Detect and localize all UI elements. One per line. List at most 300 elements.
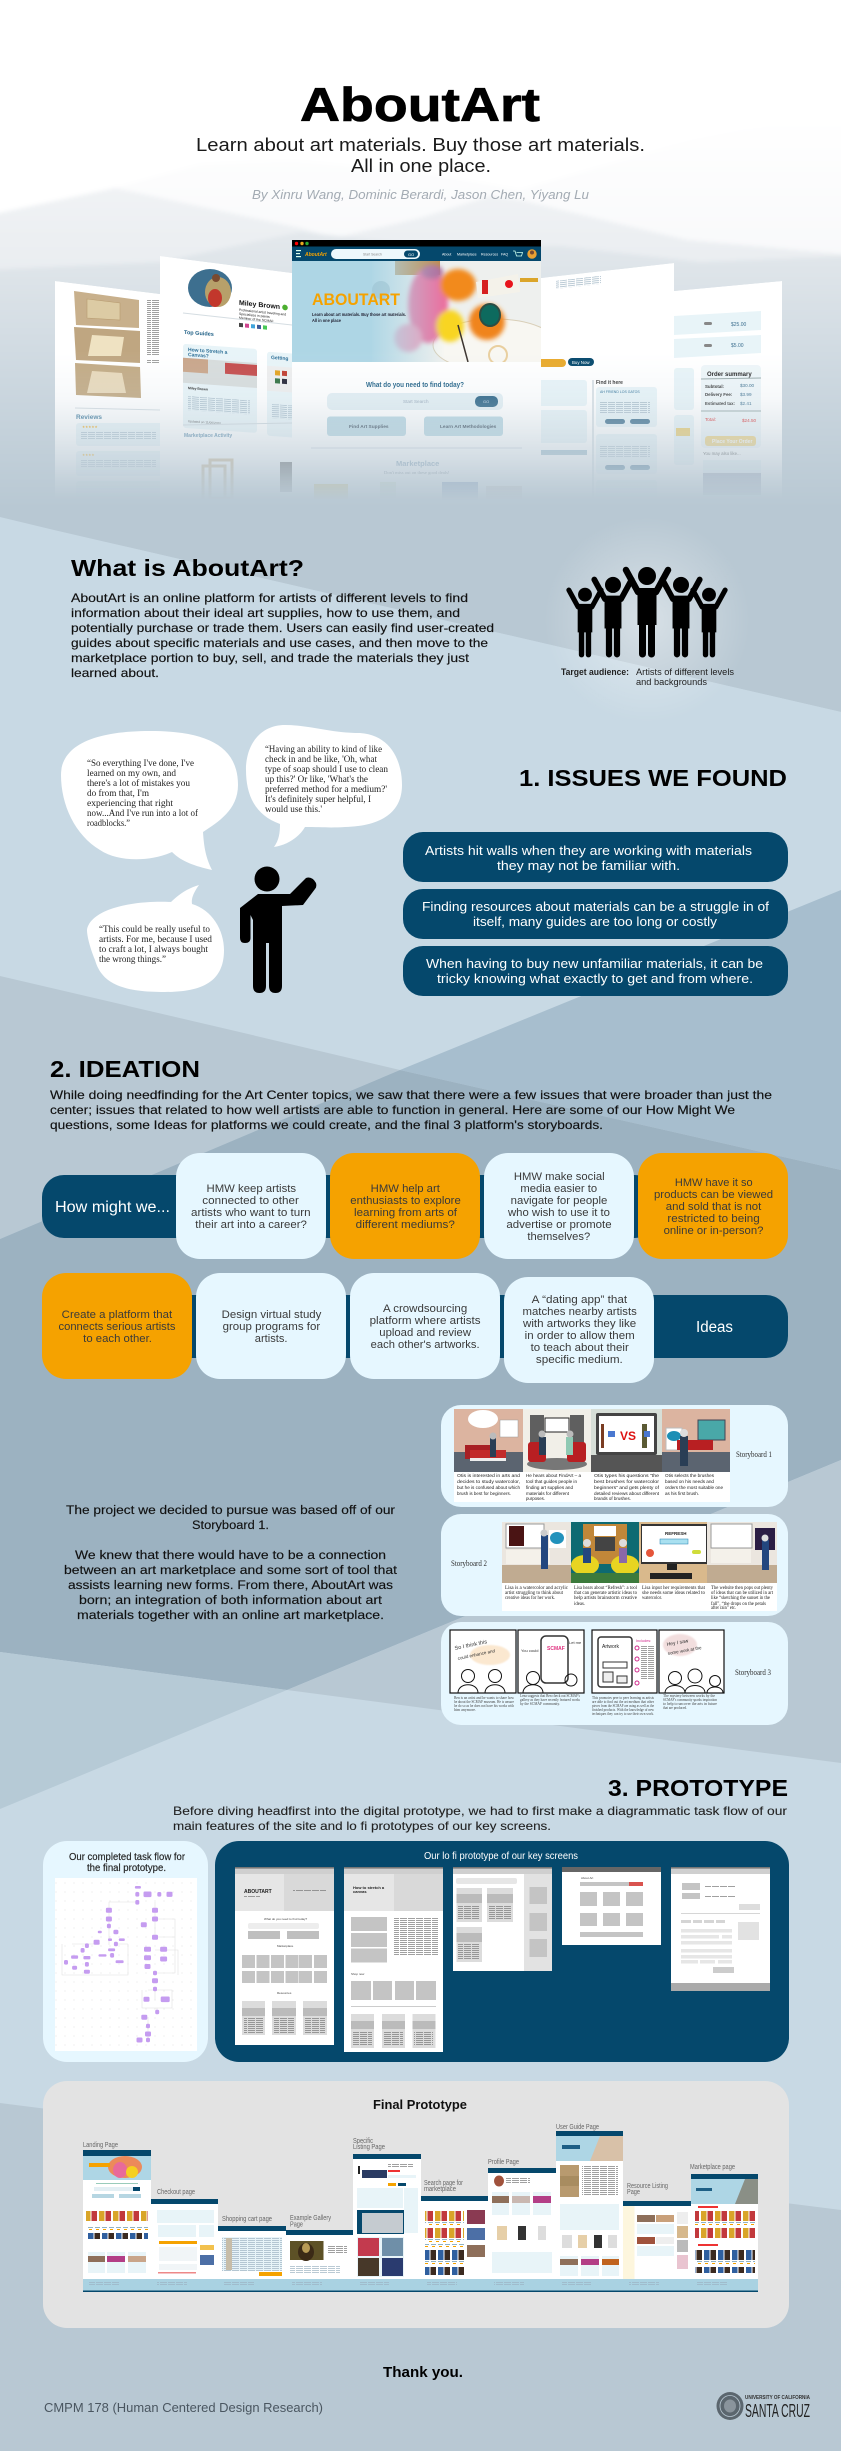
course label: CMPM 178 (Human Centered Design Research) [44, 2400, 323, 2415]
issue pill 1 [403, 832, 788, 882]
frame 3: REFRESH [665, 1531, 687, 1536]
mockup: landing page: All in one place [312, 318, 342, 323]
mockup: landing page: GO [483, 399, 489, 404]
authors: By Xinru Wang, Dominic Berardi, Jason Chen, Yiyang Lu [252, 187, 589, 202]
issue pill 2 [403, 889, 788, 939]
mockup: guide page: ★★★★★ [82, 425, 99, 429]
description [71, 591, 494, 680]
screen: landing: Landing Page [83, 2142, 118, 2149]
final screens [83, 2124, 758, 2292]
lo fi screen: guide [344, 1867, 443, 2052]
panel: storyboard 1: brands of brushes. [594, 1496, 631, 1502]
panel: storyboard 2: like “sketching the sunset in the [711, 1595, 770, 1601]
idea card 2: artists. [255, 1333, 288, 1345]
panel: storyboard 1: brush is best for beginners. [457, 1491, 511, 1497]
idea card 3: A crowdsourcing [383, 1303, 467, 1315]
screen: product listing: Specific [353, 2138, 373, 2145]
mockup: checkout page: $30.00 [740, 383, 754, 388]
frame 1 [454, 1409, 523, 1472]
issue pill 2: itself, many guides are too long or costly [473, 915, 718, 929]
idea card 4: in order to allow them [525, 1330, 635, 1342]
screen: gallery: Page [290, 2222, 303, 2228]
icon: person pointing [240, 866, 316, 993]
screen: cart [218, 2216, 286, 2279]
mockup: landing page: Resources [481, 252, 498, 256]
storyboard explanation text: born; an integration of both information about art [79, 1593, 383, 1607]
panel: lo fi prototype: Our lo fi prototype of our key screens [424, 1851, 578, 1862]
frame 3: Includes: [636, 1639, 651, 1643]
panel: storyboard 3 [441, 1622, 788, 1725]
mockup: landing page: What do you need to find today? [366, 380, 464, 389]
heading: issues we found: 1. ISSUES WE FOUND [519, 765, 787, 791]
frame 4 [662, 1409, 730, 1472]
mockup: profile page: Top Guides [184, 330, 214, 338]
how might we row [42, 1153, 788, 1259]
lo fi screen: landing: Resources [277, 1991, 292, 1995]
HMW card 1 [176, 1153, 326, 1259]
panel: task flow: the final prototype. [87, 1863, 166, 1874]
frame 2 [523, 1409, 591, 1472]
panel: storyboard 2: that can generate artistic ideas to [574, 1591, 638, 1596]
description: AboutArt is an online platform for artists of different levels to find [71, 591, 468, 605]
HMW card 2: HMW help art [371, 1183, 440, 1195]
screen: search results [421, 2180, 488, 2279]
mockup: profile page: Specializes in paints [239, 312, 270, 319]
how might we label bar: How might we... [55, 1199, 170, 1216]
idea card 4: A “dating app” that [532, 1294, 627, 1306]
panel: storyboard 2: help artists brainstorm creative [574, 1596, 637, 1601]
frame 3: Artwork [602, 1644, 619, 1650]
panel: storyboard 2: Lisa hears about “Refresh”: a tool [574, 1585, 638, 1591]
panel: storyboard 1 [441, 1405, 788, 1507]
idea card 1: Create a platform that [62, 1309, 172, 1321]
heading: What is AboutArt? [71, 555, 304, 581]
storyboard explanation text: We knew that there would have to be a connection [75, 1548, 386, 1562]
frame 2: Let me [569, 1640, 582, 1645]
panel: storyboard 2: Lisa is a watercolor and acrylic [505, 1586, 568, 1591]
mockup: profile page: Canvas? [188, 352, 209, 360]
mockup: profile page [160, 256, 292, 490]
mockup: landing page: Marketplace [457, 252, 477, 256]
speech bubble: self taught: “So everything I've done, I've [87, 758, 194, 769]
screen: user guide [556, 2124, 623, 2279]
frame 1: So I think this [454, 1639, 488, 1652]
idea card 4: matches nearby artists [522, 1306, 637, 1318]
HMW card 4: and sold that is not [666, 1201, 761, 1213]
screen: resource listing: Page [627, 2189, 640, 2196]
frame 4 [707, 1522, 777, 1583]
idea card 3: platform where artists [370, 1315, 481, 1327]
panel: storyboard 3: that are produced. [663, 1706, 687, 1710]
description: learned about. [71, 666, 159, 680]
panel: storyboard 3: he do so as he does not have his works with [454, 1704, 514, 1708]
panel: task flow: Our completed task flow for [69, 1852, 186, 1863]
issue pill 1: they may not be familiar with. [497, 859, 680, 873]
screen: product listing: Listing Page [353, 2144, 385, 2151]
HMW card 1: connected to other [202, 1195, 299, 1207]
speech bubble: self taught: there's a lot of mistakes you [87, 778, 190, 789]
idea card 1: to each other. [83, 1333, 152, 1345]
speech bubble: wrong things: to craft a lot, I always bought [99, 944, 208, 955]
speech bubble: self taught: roadblocks.” [87, 818, 130, 829]
mockup: landing page: Start Search [403, 399, 429, 404]
issue pill 2: Finding resources about materials can be a struggle in of [422, 900, 770, 914]
description: guides about specific materials and use cases, and then move to the [71, 636, 488, 650]
panel: task flow [43, 1841, 208, 2062]
mockup: landing page: GO [408, 252, 414, 257]
screen: resource listing: Resource Listing [627, 2183, 668, 2190]
screen: landing [83, 2142, 151, 2279]
lo fi screen: guide: How to stretch a [353, 1885, 385, 1890]
panel: storyboard 3: pieces from the SCMAF are using as well as the [592, 1704, 654, 1708]
icon: target audience group [542, 515, 752, 725]
panel: storyboard 3: he about the SCMAF museum. He is unsure [454, 1700, 514, 1704]
mockup: checkout page: $25.00 [731, 322, 747, 328]
screen: gallery: Example Gallery [290, 2215, 331, 2222]
frame 3 [591, 1409, 662, 1472]
mockup: landing page: AboutArt [304, 252, 327, 258]
speech bubble: wrong things [87, 885, 224, 992]
mockup: profile page: Marketplace Activity [184, 433, 232, 439]
description: information about their ideal art supplies, how to use them, and [71, 606, 460, 620]
title: AboutArt [300, 78, 540, 131]
section: what is AboutArt [71, 555, 494, 680]
lo fi screen: landing [235, 1867, 334, 2045]
panel: storyboard 1: purposes. [526, 1496, 545, 1502]
storyboard explanation text: assists learning new forms. From there, AboutArt was [68, 1578, 393, 1592]
idea card 4: to teach about their [531, 1342, 629, 1354]
issue pill 1: Artists hit walls when they are working with materials [425, 844, 752, 858]
idea card 2: group programs for [223, 1321, 321, 1333]
panel: storyboard 1: decides to study watercolor, [457, 1479, 520, 1485]
screen: user guide: User Guide Page [556, 2124, 599, 2131]
panel: storyboard 1: Otis types his questions “the [594, 1473, 659, 1479]
panel: storyboard 3: Ben is an artist and he wants to share how [454, 1696, 514, 1700]
mockup: landing page: Learn Art Methodologies [440, 424, 497, 430]
HMW card 1: artists who want to turn [191, 1207, 311, 1219]
mockup: product page [541, 263, 674, 480]
heading: prototype: 3. PROTOTYPE [608, 1775, 788, 1801]
panel: storyboard 2 [441, 1514, 788, 1616]
mockup: profile page: Member of the SCMAF [239, 316, 274, 323]
panel: storyboard 3: Storyboard 3 [735, 1667, 771, 1677]
HMW card 2: learning from arts of [354, 1207, 458, 1219]
panel: storyboard 1: materials for different [526, 1491, 570, 1497]
panel: storyboard 2: Storyboard 2 [451, 1558, 487, 1568]
frame 1 [450, 1630, 516, 1693]
speech bubble: self taught: do from that, I'm [87, 788, 150, 799]
frame 3: VS [620, 1429, 636, 1443]
lo fi screen: landing: ABOUTART [244, 1889, 272, 1895]
speech bubble: self taught: now...And I've run into a lot of [87, 808, 199, 819]
speech bubble: wrong things: “This could be really useful to [99, 924, 210, 935]
idea card 1 [42, 1273, 192, 1379]
panel: storyboard 3: techniques they can try to use their own work. [592, 1712, 654, 1716]
mockup: product page: Buy Now [572, 360, 590, 365]
speech bubble: self taught: experiencing that right [87, 798, 173, 809]
panel: storyboard 3: by the SCMAF community. [520, 1702, 560, 1706]
storyboard explanation text: between an art marketplace and some sort of tool that [64, 1563, 398, 1577]
screen: cart: Shopping cart page [222, 2216, 272, 2223]
panel: storyboard 3: are able to find out the art medium that other [592, 1700, 655, 1704]
mockup: product page: ick Liquid Watercolors [541, 216, 616, 233]
issue pill 3: When having to buy new unfamiliar materials, it can be [426, 957, 763, 971]
HMW card 4: products can be viewed [654, 1189, 773, 1201]
panel: storyboard 3: This promotes peer to peer learning as artists [592, 1696, 655, 1700]
panel: storyboard 1: Otis is interested in arts and [457, 1473, 520, 1479]
panel: storyboard 1: He hears about FindArt – a [526, 1473, 581, 1479]
HMW card 3: who wish to use it to [507, 1207, 610, 1219]
ideation description: While doing needfinding for the Art Center topics, we saw that there were a few issues that were broader than just the [50, 1088, 772, 1102]
idea card 3: each other's artworks. [371, 1339, 480, 1351]
website mockups [55, 240, 782, 492]
frame 4: some work at the [667, 1645, 702, 1656]
screen: profile [488, 2159, 556, 2279]
HMW card 2: enthusiasts to explore [350, 1195, 461, 1207]
HMW card 4: online or in-person? [664, 1225, 763, 1237]
mockup: profile page: Getting [271, 355, 288, 362]
mockup: landing page: Start Search [363, 252, 382, 256]
frame 1: could enhance and [457, 1648, 496, 1661]
mockup: checkout page: Estimated tax: [705, 401, 736, 406]
panel: storyboard 2: watercolor. [642, 1596, 662, 1601]
panel: storyboard 1: Storyboard 1 [736, 1449, 772, 1459]
storyboard explanation text [64, 1503, 398, 1622]
how might we label bar [42, 1175, 657, 1238]
panel: storyboard 3: finished products. With the knowledge of new [592, 1708, 654, 1712]
panel: storyboard 3: him anymore. [454, 1708, 476, 1712]
HMW card 1: HMW keep artists [206, 1183, 297, 1195]
panel: storyboard 1: beginners” and gets plenty of [594, 1485, 660, 1491]
issue pill 3 [403, 946, 788, 996]
panel: final prototype [43, 2081, 789, 2328]
panel: storyboard 2: The website then pops out plenty [711, 1586, 774, 1591]
ideas row [42, 1273, 788, 1383]
thank you: Thank you. [383, 2365, 463, 2381]
panel: storyboard 2: after rain” etc. [711, 1606, 736, 1611]
HMW card 2: different mediums? [356, 1219, 455, 1231]
panel: storyboard 1: but he is confused about which [457, 1485, 520, 1491]
panel: storyboard 3: gallery as they have recently featured works [520, 1698, 581, 1702]
mockup: checkout page: $24.50 [742, 418, 756, 423]
mockup: checkout page: Place Your Order [712, 439, 752, 445]
ideation description: center; issues that related to how well artists are able to function in general. Here are some of our How Might We [50, 1103, 735, 1117]
description: marketplace portion to buy, sell, and trade the materials they just [71, 651, 470, 665]
mockup: profile page: Updated on 11/06/2020 [188, 419, 221, 425]
mockup: guide page: ★★★★ [82, 453, 95, 457]
subtitle: All in one place. [351, 155, 491, 176]
mockup: product page: 2.93 - $112.00 [541, 235, 586, 246]
HMW card 4 [638, 1153, 788, 1259]
ideas label bar: Ideas [696, 1319, 733, 1336]
lo fi screen: guide: Shop now [351, 1972, 365, 1976]
mockup: product page: AH FRIEND LOS GATOS [600, 390, 640, 394]
speech bubble: ability to check in: check in and be like, 'Oh, what [265, 754, 377, 765]
mockup: landing page: Marketplace [396, 459, 439, 468]
speech bubble: ability to check in: up this?' Or like, 'What's the [265, 774, 368, 785]
mockup: checkout page: $3.99 [740, 392, 752, 397]
panel: storyboard 3: Lena suggests that Ben check out SCMAF's [520, 1694, 581, 1698]
idea card 3: upload and review [379, 1327, 471, 1339]
frame 2: SCMAF [547, 1646, 565, 1652]
prototype description [173, 1804, 787, 1833]
panel: storyboard 1: as his first brush. [665, 1491, 699, 1497]
panel: storyboard 1: best brushes for watercolor [594, 1479, 659, 1485]
panel: storyboard 2: of ideas that can be utilized in art [711, 1591, 774, 1596]
HMW card 3: navigate for people [511, 1195, 607, 1207]
frame 2: You could [521, 1648, 538, 1653]
screen: search results: Search page for [424, 2180, 464, 2187]
mockup: profile page: Miley Brown [188, 386, 208, 392]
HMW card 3: HMW make social [514, 1171, 605, 1183]
panel: storyboard 3: The mystery between works by the [663, 1694, 715, 1698]
issue pill 3: tricky knowing what exactly to get and from where. [437, 972, 753, 986]
HMW card 4: restricted to being [667, 1213, 760, 1225]
mockup: landing page: Find Art Supplies [349, 424, 389, 430]
storyboard explanation text: The project we decided to pursue was based off of our [66, 1503, 395, 1517]
screen: checkout: Checkout page [157, 2189, 195, 2196]
panel: storyboard 3: to help to uncover the arts in future [663, 1702, 717, 1706]
HMW card 1: their art into a career? [195, 1219, 307, 1231]
speech bubble: ability to check in [246, 725, 402, 847]
panel: storyboard 3: SCMAF's community sparks inspiration [663, 1698, 717, 1702]
UCSC logo [716, 2392, 810, 2421]
idea card 2 [196, 1273, 346, 1379]
screen: product listing [353, 2138, 421, 2279]
mockup: landing page: FAQ [501, 252, 508, 256]
screen: marketplace [690, 2164, 758, 2279]
mockup: checkout page: Subtotal: [705, 384, 725, 389]
mockup: profile page: Professional artist traveling and [239, 308, 286, 317]
speech bubble: ability to check in: would use this.' [265, 804, 322, 815]
mockup: landing page: Learn about art materials. Buy those art materials. [312, 312, 406, 317]
mockup: landing page [292, 240, 541, 492]
frame 3 [592, 1630, 657, 1693]
lo fi screen: gallery [562, 1867, 661, 1945]
speech bubble: ability to check in: type of soap should I use to clean [265, 764, 388, 775]
subtitle [196, 134, 645, 176]
panel: storyboard 2: Lisa input her requirements that [642, 1586, 706, 1591]
HMW card 2 [330, 1153, 480, 1259]
frame 3 [639, 1522, 707, 1583]
frame 4: Hey I saw [666, 1638, 689, 1648]
mockup: checkout page [674, 281, 782, 480]
target audience caption: Target audience: [561, 667, 629, 677]
frame 2 [571, 1522, 639, 1583]
panel: storyboard 2: fall”, “the drops on the petals [711, 1601, 766, 1607]
panel: storyboard 2: creative ideas for her work. [505, 1596, 555, 1601]
screen: gallery [286, 2215, 353, 2279]
frame 4 [659, 1630, 724, 1693]
speech bubble: ability to check in: “Having an ability to kind of like [265, 744, 382, 755]
ideation description [50, 1088, 772, 1132]
screen: marketplace: Marketplace page [690, 2164, 735, 2171]
idea card 2: Design virtual study [222, 1309, 322, 1321]
idea card 4 [504, 1277, 654, 1383]
mockup: landing page: About [442, 252, 451, 256]
mockup: landing page: ABOUTART [312, 290, 401, 309]
HMW card 3: media easier to [520, 1183, 597, 1195]
UCSC logo: UNIVERSITY OF CALIFORNIA [745, 2395, 810, 2401]
HMW card 3: themselves? [527, 1231, 590, 1243]
HMW card 3 [484, 1153, 634, 1259]
target audience caption: and backgrounds [636, 677, 708, 687]
speech bubble: ability to check in: It's definitely super helpful, I [265, 794, 371, 805]
target audience caption: Artists of different levels [636, 667, 735, 677]
lo fi screen: checkout [671, 1867, 770, 1991]
speech bubble: self taught: learned on my own, and [87, 768, 176, 779]
idea card 4: specific medium. [536, 1354, 623, 1366]
screen: search results: marketplace [424, 2186, 456, 2193]
storyboard explanation text: materials together with an online art marketplace. [77, 1608, 384, 1622]
lo fi screen: guide: canvas [353, 1889, 367, 1894]
frame 1 [502, 1522, 571, 1583]
mockup: profile page: How to Stretch a [188, 347, 228, 356]
HMW card 3: advertise or promote [506, 1219, 612, 1231]
target audience caption [561, 667, 735, 687]
ideation description: questions, some Ideas for platforms we could create, and the final 3 platform's storyboards. [50, 1118, 603, 1132]
panel: storyboard 1: finding art supplies and [526, 1485, 573, 1491]
mockup: profile page: Miley Brown [239, 300, 280, 311]
mockup: checkout page: $5.00 [731, 343, 744, 349]
speech bubble: ability to check in: preferred method for a medium?' [265, 784, 387, 795]
panel: storyboard 1: tool that guides people in [526, 1479, 577, 1485]
screen: checkout [151, 2189, 218, 2279]
mockup: guide page [55, 281, 160, 480]
panel: storyboard 1: Otis selects the brushes [665, 1473, 715, 1479]
speech bubble: wrong things: the wrong things.” [99, 954, 166, 965]
panel: storyboard 1: detailed reviews about different [594, 1491, 660, 1497]
lo fi screen: landing: Marketplace [277, 1944, 294, 1948]
panel: storyboard 1: orders the most suitable one [665, 1485, 723, 1491]
speech bubble: self taught [61, 731, 238, 870]
mockup: checkout page: Total: [705, 417, 716, 422]
screen: profile: Profile Page [488, 2159, 519, 2166]
prototype description: main features of the site and lo fi prototypes of our key screens. [173, 1819, 551, 1833]
mockup: landing page: Don't miss out on these good deals! [384, 470, 450, 475]
mockup: guide page: Reviews [76, 414, 102, 421]
speech bubble: wrong things: artists. For me, because I used [99, 934, 212, 945]
screen footers [83, 2279, 758, 2292]
panel: storyboard 2: she needs some ideas related to [642, 1591, 706, 1596]
panel: storyboard 2: artist struggling to think about [505, 1591, 564, 1596]
idea card 1: connects serious artists [58, 1321, 176, 1333]
panel: storyboard 1: based on his needs and [665, 1479, 714, 1485]
frame 2 [518, 1630, 584, 1693]
mockup: product page: Find it here [596, 380, 623, 386]
panel: storyboard 2: ideas. [574, 1602, 585, 1607]
mockup: checkout page: You may also like... [703, 451, 741, 456]
idea card 3 [350, 1273, 500, 1379]
lo fi screen: resources [453, 1867, 552, 1971]
HMW card 4: HMW have it so [675, 1177, 753, 1189]
task flow diagram [62, 1886, 178, 2042]
lo fi screen: gallery: About Art [581, 1876, 594, 1880]
storyboard explanation text: Storyboard 1. [192, 1518, 269, 1532]
subtitle: Learn about art materials. Buy those art materials. [196, 134, 645, 155]
ideas label bar [170, 1295, 788, 1358]
lo fi screen: landing: What do you need to find today? [264, 1917, 308, 1921]
panel: final prototype: Final Prototype [373, 2097, 467, 2112]
screen: resource listing [623, 2183, 691, 2279]
panel: lo fi prototype [215, 1841, 789, 2062]
heading: ideation: 2. IDEATION [50, 1056, 200, 1082]
description: potentially purchase or trade them. Users can easily find user-created [71, 621, 494, 635]
mockup: checkout page: $2.41 [740, 401, 752, 406]
prototype description: Before diving headfirst into the digital prototype, we had to first make a diagrammatic task flow of our [173, 1804, 787, 1818]
idea card 4: with artworks they like [522, 1318, 636, 1330]
mockup: checkout page: Delivery Fee: [705, 392, 733, 397]
